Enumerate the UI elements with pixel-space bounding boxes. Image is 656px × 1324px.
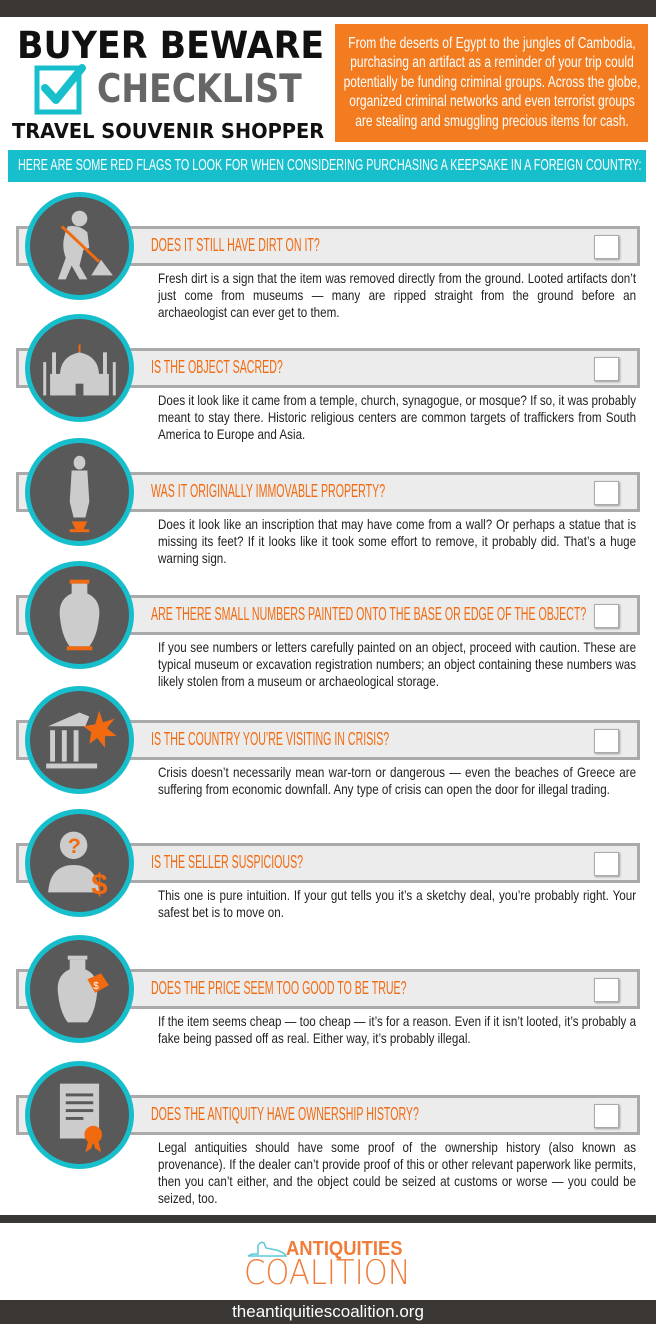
icon: vase with numbers — [25, 561, 134, 669]
text: Does it look like it came from a temple, church, synagogue, or mosque? If so, it was probably meant to stay there. Historic religious centers are common targets of traffickers from South America to Europe and Asia. — [158, 392, 636, 442]
banner — [8, 150, 646, 182]
intro callout: purchasing an artifact as a reminder of your trip could — [350, 54, 634, 71]
item 1 — [16, 192, 640, 320]
icon: digger — [25, 192, 134, 300]
checkbox — [594, 729, 619, 753]
footer — [0, 1300, 656, 1324]
checkbox — [594, 604, 619, 628]
intro callout — [335, 24, 648, 142]
title block — [12, 24, 324, 143]
heading: IS THE SELLER SUSPICIOUS? — [151, 852, 303, 872]
icon: suspicious seller — [25, 809, 134, 917]
heading: DOES IT STILL HAVE DIRT ON IT? — [151, 235, 320, 255]
icon: vase with price tag — [25, 935, 134, 1043]
icon: temple in crisis — [25, 686, 134, 794]
heading: IS THE COUNTRY YOU’RE VISITING IN CRISIS? — [151, 729, 389, 749]
logo: ANTIQUITIES — [286, 1238, 403, 1260]
item 6 — [16, 809, 640, 920]
text: Legal antiquities should have some proof of the ownership history (also known as provenance). If the dealer can’t provide proof of this or other relevant paperwork like permits, then you can’t either, and the object could be seized at customs or worse — you could be seized, too. — [158, 1139, 636, 1206]
intro callout: organized criminal networks and even terrorist groups — [349, 93, 635, 110]
subtitle: TRAVEL SOUVENIR SHOPPER — [12, 119, 324, 143]
intro callout: are stealing and smuggling precious items for cash. — [355, 113, 629, 130]
icon: suspicious seller: $ — [91, 868, 108, 901]
intro callout: potentially be funding criminal groups. Across the globe, — [344, 74, 640, 91]
text: If the item seems cheap — too cheap — it’s for a reason. Even if it isn’t looted, it’s probably a fake being passed off as real. Either way, it’s probably illegal. — [158, 1013, 636, 1046]
bottom divider bar — [0, 1215, 656, 1223]
item 8 — [16, 1061, 640, 1206]
icon: certificate — [25, 1061, 134, 1169]
footer: theantiquitiescoalition.org — [232, 1302, 424, 1321]
text: This one is pure intuition. If your gut tells you it’s a sketchy deal, you’re probably right. Your safest bet is to move on. — [158, 887, 636, 920]
checkbox — [594, 852, 619, 876]
text: If you see numbers or letters carefully painted on an object, proceed with caution. These are typical museum or excavation registration numbers; an object containing these numbers was likely stolen from a museum or archaeological storage. — [158, 639, 636, 689]
text: Does it look like an inscription that may have come from a wall? Or perhaps a statue that is missing its feet? If it looks like it took some effort to remove, it probably did. That’s a huge warning sign. — [158, 516, 636, 566]
icon: vase with price tag: $ — [93, 981, 99, 992]
checkbox — [594, 357, 619, 381]
item 4 — [16, 561, 640, 689]
top bar — [0, 0, 656, 17]
heading: WAS IT ORIGINALLY IMMOVABLE PROPERTY? — [151, 481, 385, 501]
heading: IS THE OBJECT SACRED? — [151, 357, 283, 377]
icon: sphinx — [248, 1242, 288, 1257]
item 3 — [16, 438, 640, 566]
checkbox — [594, 481, 619, 505]
icon: statue — [25, 438, 134, 546]
intro callout: From the deserts of Egypt to the jungles of Cambodia, — [348, 35, 636, 52]
heading: ARE THERE SMALL NUMBERS PAINTED ONTO THE BASE OR EDGE OF THE OBJECT? — [151, 604, 586, 624]
icon: suspicious seller: ? — [68, 833, 81, 858]
text: Crisis doesn’t necessarily mean war-torn or dangerous — even the beaches of Greece are suffering from economic downfall. Any type of crisis can open the door for illegal trading. — [158, 764, 636, 797]
item 5 — [16, 686, 640, 797]
banner: HERE ARE SOME RED FLAGS TO LOOK FOR WHEN CONSIDERING PURCHASING A KEEPSAKE IN A FOREIGN COUNTRY: — [18, 157, 642, 174]
title: buyer beware: BUYER BEWARE — [17, 24, 324, 67]
logo: COALITION — [244, 1253, 411, 1293]
icon: checkbox — [34, 64, 86, 114]
checkbox — [594, 235, 619, 259]
heading: DOES THE ANTIQUITY HAVE OWNERSHIP HISTORY? — [151, 1104, 419, 1124]
checkbox — [594, 1104, 619, 1128]
heading: DOES THE PRICE SEEM TOO GOOD TO BE TRUE? — [151, 978, 407, 998]
title: checklist: CHECKLIST — [97, 67, 302, 112]
item 2 — [16, 314, 640, 442]
item 7 — [16, 935, 640, 1046]
icon: mosque — [25, 314, 134, 422]
text: Fresh dirt is a sign that the item was removed directly from the ground. Looted artifacts don’t just come from museums — many are ripped straight from the ground before an archaeologist can ever get to them. — [158, 270, 636, 320]
checkbox — [594, 978, 619, 1002]
